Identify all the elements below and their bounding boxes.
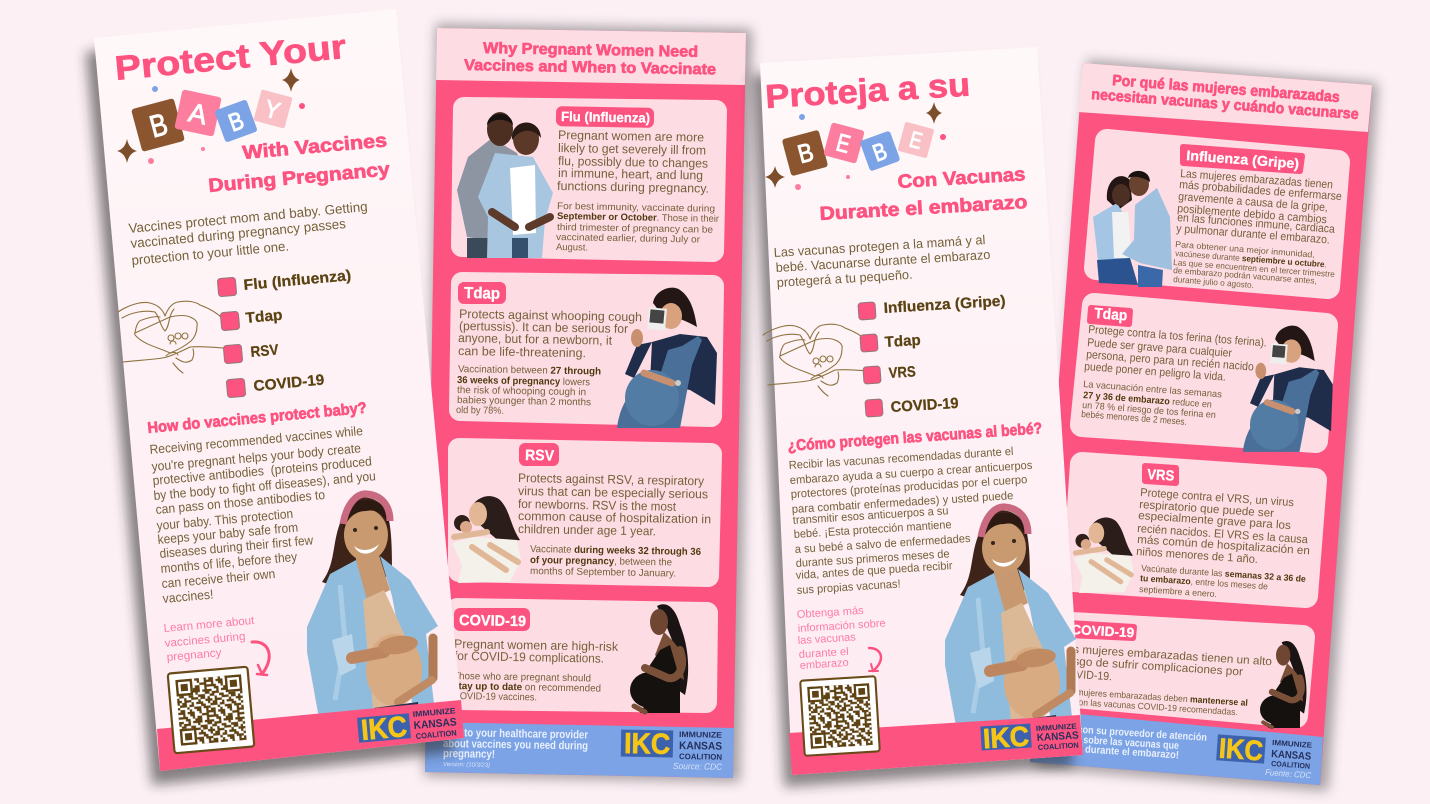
text: influenza timing: durante julio o agosto.: [1173, 274, 1254, 290]
QR code: [168, 667, 254, 753]
text: influenza timing: de embarazo podrán vacunarse antes,: [1173, 265, 1317, 286]
logo: IKC: [980, 721, 1079, 754]
heading: como protegen las vacunas al bebe: ¿Cómo protegen las vacunas al bebé?: [787, 420, 1043, 455]
text: learn more: [163, 615, 256, 664]
text: explanation: vida, antes de que pueda recibir: [795, 560, 953, 582]
text: intro: [773, 232, 991, 290]
text: RSV timing: months of September to January.: [530, 566, 676, 580]
vaccine checklist: [858, 293, 1006, 417]
logo: IKC: KANSAS: [413, 716, 457, 732]
card: Tdap: [1081, 305, 1333, 452]
text: flu timing: vaccinated earlier, during July or: [556, 232, 701, 246]
text: intro: vaccinated during pregnancy passes: [130, 216, 347, 251]
text: Tdap description: (pertussis). It can be serious for: [459, 319, 628, 336]
text: influenza timing: Las que se encuentren en el tercer trimestre: [1173, 257, 1335, 279]
text: explanation: transmitir esos anticuerpos a su: [792, 505, 949, 527]
text: RSV description: children under age 1 year.: [518, 522, 656, 538]
text: influenza description: [1176, 168, 1342, 247]
text: explanation: durante sus primeros meses de: [795, 548, 950, 570]
card: COVID-19: [453, 604, 707, 713]
text: intro: protegerá a tu pequeño.: [776, 267, 913, 290]
text: explanation: months of life, before they: [160, 549, 298, 576]
text: learn more: vaccines during: [164, 631, 246, 650]
footer band: Source: CDC: [673, 761, 723, 772]
text: explanation: can receive their own: [161, 566, 276, 591]
text: COVID-19 advice: Las mujeres embarazadas deben mantenerse al: [1060, 686, 1248, 708]
title blocks: BABY: B: [225, 106, 248, 137]
arrow: to QR code: [869, 648, 881, 671]
text: influenza timing: [1173, 239, 1335, 290]
photo: woman holding ultrasound: [1243, 326, 1333, 452]
footer band: Version: (10/3/23): [443, 762, 490, 769]
vaccine checklist: Tdap: [884, 332, 921, 351]
QR code: [800, 676, 880, 756]
text: COVID-19 description: COVID-19.: [1060, 668, 1112, 683]
text: Tdap description: Protects against whooping cough: [459, 307, 642, 324]
title blocks: BABY: Y: [261, 95, 283, 125]
text: VRS description: respiratorio que puede ser: [1139, 499, 1274, 520]
text: explanation: your baby. This protection: [156, 506, 294, 533]
vaccine checklist: [217, 267, 352, 398]
logo: IKC: KANSAS: [1036, 729, 1079, 744]
text: influenza description: Las mujeres embarazadas tienen: [1180, 168, 1333, 191]
logo: IKC: IMMUNIZE: [412, 706, 457, 719]
photo: smiling pregnant woman: [945, 507, 1076, 737]
logo: IKC: IKC: [624, 728, 670, 761]
photo: couple foreheads together: [1093, 171, 1172, 287]
photo: mother kissing newborn: [1074, 517, 1134, 593]
text: influenza timing: vacúnese durante septiembre u octubre.: [1175, 248, 1327, 269]
text: RSV timing: Vaccinate during weeks 32 through 36: [530, 544, 702, 558]
footer band: [425, 722, 734, 778]
logo: IKC: IMMUNIZE: [679, 730, 723, 740]
text: RSV description: [518, 471, 711, 538]
header band: Por qué las mujeres embarazadas: [1112, 72, 1340, 106]
label: Tdap: Tdap: [464, 285, 500, 303]
text: COVID-19 description: Las mujeres embarazadas tienen un alto: [1060, 643, 1272, 668]
text: learn more: embarazo: [799, 657, 849, 672]
title: Protect Your: Protect Your: [113, 28, 348, 88]
text: learn more: información sobre: [797, 617, 886, 635]
photo: expecting couple: [457, 112, 553, 258]
title: Proteja a su: Proteja a su: [764, 66, 971, 115]
photo: pregnant woman in profile: [1260, 641, 1307, 728]
vaccine checklist: COVID-19: [253, 371, 325, 395]
vaccine checklist: Influenza (Gripe): [883, 293, 1006, 317]
text: flu description: Pregnant women are more: [558, 128, 704, 145]
card: flu: [457, 106, 720, 258]
title blocks: BEBE: B: [869, 138, 891, 167]
label: Tdap: Tdap: [1094, 305, 1128, 324]
subtitle: [819, 164, 1028, 225]
text: explanation: Receiving recommended vaccines while: [149, 423, 363, 457]
text: flu description: [557, 128, 709, 196]
label: Tdap: [458, 282, 506, 304]
text: Tdap timing: 27 y 36 de embarazo reduce en: [1083, 390, 1212, 411]
vaccine checklist: Tdap: [245, 307, 283, 327]
subtitle: During Pregnancy: [208, 159, 391, 197]
text: influenza description: gravemente a causa de la gripe,: [1178, 191, 1328, 214]
text: Tdap timing: old by 78%.: [456, 405, 504, 417]
label: flu: Flu (Influenza): [561, 109, 650, 126]
text: COVID-19 advice: Those who are pregnant should: [453, 671, 591, 684]
title blocks: BABY: A: [186, 97, 210, 131]
vaccine checklist: COVID-19: [890, 395, 959, 416]
footer band: médica sobre las vacunas que: [1050, 732, 1179, 752]
logo: IKC: KANSAS: [679, 740, 722, 753]
text: influenza description: más probabilidades de enfermarse: [1179, 179, 1342, 203]
header band: Why Pregnant Women Need: [483, 40, 698, 61]
panel: Spanish back page, why and when to vaccinate: [1030, 63, 1372, 785]
panel: English back page, why and when to vaccinate: [425, 28, 746, 778]
label: RSV: [519, 443, 559, 466]
footer band: Talk to your healthcare provider: [443, 727, 589, 742]
text: Tdap timing: babies younger than 2 months: [457, 395, 591, 408]
text: Tdap description: anyone, but for a newborn, it: [458, 331, 613, 348]
text: Tdap timing: Vaccination between 27 through: [458, 364, 601, 377]
arrow: to QR code: [252, 642, 269, 675]
text: explanation: can pass on those antibodies to: [155, 487, 326, 517]
title blocks: BEBE: E: [833, 129, 853, 159]
subtitle: [208, 130, 391, 197]
subtitle: Durante el embarazo: [819, 192, 1028, 225]
photo: mother kissing newborn: [452, 496, 521, 583]
text: VRS description: recién nacidos. El VRS es la causa: [1137, 523, 1309, 546]
vaccine checklist: Flu (Influenza): [243, 267, 352, 294]
text: VRS timing: septiembre a enero.: [1139, 584, 1217, 599]
text: Tdap description: puede poner en peligro la vida.: [1084, 361, 1226, 384]
label: COVID-19: COVID-19: [459, 612, 526, 630]
text: Tdap timing: 36 weeks of pregnancy lowers: [457, 375, 590, 388]
text: RSV description: Protects against RSV, a respiratory: [518, 471, 705, 488]
footer band: [789, 715, 1083, 775]
text: Tdap timing: the risk of whooping cough in: [457, 385, 586, 398]
icon: hands forming heart: [763, 324, 868, 396]
logo: IKC: IMMUNIZE: [1272, 738, 1312, 750]
panel: English front page, protect your baby: [94, 9, 464, 771]
text: Tdap timing: bebés menores de 2 meses.: [1081, 409, 1187, 428]
text: flu timing: September or October. Those in their: [557, 211, 720, 225]
text: learn more: Obtenga más: [796, 605, 865, 621]
header band: [1078, 63, 1372, 132]
text: VRS description: niños menores de 1 año.: [1136, 546, 1258, 566]
logo: IKC: COALITION: [415, 728, 457, 741]
subtitle: With Vaccines: [242, 130, 388, 164]
card: RSV: [452, 443, 711, 583]
text: flu description: flu, possibly due to changes: [558, 154, 708, 171]
text: Tdap timing: [456, 364, 601, 417]
text: learn more: [796, 605, 886, 672]
text: RSV timing: of your pregnancy, between the: [530, 555, 673, 568]
title blocks: BEBE: B: [794, 136, 817, 169]
icon: hands forming heart: [118, 301, 223, 373]
text: influenza description: en las funciones inmune, cardiaca: [1177, 212, 1336, 236]
text: RSV description: virus that can be especially serious: [518, 484, 708, 501]
text: VRS description: Protege contra el VRS, un virus: [1140, 487, 1294, 509]
logo: IKC: COALITION: [679, 752, 722, 762]
text: flu timing: August.: [556, 242, 588, 254]
header band: necesitan vacunas y cuándo vacunarse: [1091, 86, 1359, 123]
text: VRS description: más común de hospitalización en: [1137, 534, 1310, 557]
text: flu description: functions during pregnancy.: [557, 179, 709, 196]
label: RSV: RSV: [525, 447, 554, 465]
text: explanation: bebé. ¡Esta protección mantiene: [793, 519, 952, 541]
label: COVID-19: COVID-19: [1071, 622, 1135, 640]
text: explanation: sus propias vacunas!: [796, 578, 901, 597]
footer band: [157, 700, 464, 771]
text: flu description: in immune, heart, and lung: [558, 166, 703, 183]
logo: IKC: [621, 728, 723, 762]
text: Tdap description: Protege contra la tos ferina (tos ferina).: [1088, 324, 1267, 349]
text: explanation: embarazo ayuda a su cuerpo a crear anticuerpos: [789, 460, 1033, 487]
vaccine checklist: RSV: [250, 341, 279, 361]
footer band: [1030, 710, 1323, 785]
text: intro: Vaccines protect mom and baby. Getting: [128, 199, 368, 236]
title blocks: BABY: [117, 68, 305, 164]
text: learn more: las vacunas: [797, 631, 857, 647]
text: flu timing: third trimester of pregnancy can be: [557, 222, 713, 236]
card: influenza: [1093, 141, 1342, 290]
subtitle: Con Vacunas: [897, 164, 1026, 193]
logo: IKC: COALITION: [1271, 759, 1310, 771]
text: learn more: durante el: [798, 646, 849, 661]
text: COVID-19 description: Pregnant women are high-risk: [454, 637, 619, 654]
text: COVID-19 description: [454, 637, 619, 666]
text: COVID-19 description: for COVID-19 complications.: [454, 649, 604, 666]
logo: IKC: [1216, 732, 1312, 771]
panel: Spanish front page, proteja a su bebe: [760, 47, 1083, 775]
text: Tdap description: [458, 307, 642, 360]
text: explanation: protective antibodies (proteins produced: [152, 453, 372, 488]
footer band: pregnancy!: [443, 748, 495, 761]
footer band: about vaccines you need during: [443, 738, 588, 753]
text: Tdap timing: un 78 % el riesgo de tos ferina en: [1082, 400, 1216, 421]
text: learn more: pregnancy: [166, 647, 222, 664]
title blocks: BEBE: E: [907, 126, 925, 154]
text: explanation: [149, 423, 376, 606]
text: RSV description: for newborns. RSV is the most: [518, 497, 677, 514]
text: influenza timing: Para obtener una mejor inmunidad,: [1175, 239, 1315, 259]
logo: IKC: KANSAS: [1271, 748, 1312, 763]
text: RSV description: common cause of hospitalization in: [518, 509, 711, 526]
logo: IKC: IKC: [982, 721, 1030, 754]
card: VRS: [1074, 464, 1315, 599]
text: explanation: protectores (proteínas producidas por el cuerpo: [790, 474, 1028, 501]
text: explanation: diseases during their first few: [159, 532, 314, 561]
logo: IKC: IMMUNIZE: [1036, 722, 1077, 733]
text: Tdap description: persona, pero para un recién nacido: [1086, 349, 1254, 374]
logo: IKC: IKC: [360, 711, 408, 747]
text: Tdap timing: [1081, 379, 1222, 428]
photo: woman holding ultrasound: [617, 288, 717, 428]
text: COVID-19 advice: stay up to date on recommended: [453, 681, 601, 695]
text: explanation: by the body to fight off diseases), and you: [153, 468, 376, 503]
footer band: Fuente: CDC: [1265, 767, 1312, 780]
label: VRS: VRS: [1147, 467, 1175, 485]
text: COVID-19 advice: día con las vacunas COVID-19 recomendadas.: [1060, 696, 1238, 717]
logo: IKC: COALITION: [1038, 741, 1079, 752]
text: VRS description: especialmente grave para los: [1138, 510, 1292, 532]
text: explanation: Recibir las vacunas recomendadas durante el: [788, 446, 1014, 472]
text: VRS timing: tu embarazo, entre los meses de: [1140, 573, 1268, 591]
text: COVID-19 advice: [453, 671, 601, 703]
logo: IKC: [357, 706, 457, 747]
vaccine checklist: VRS: [888, 363, 916, 382]
text: COVID-19 advice: COVID-19 vaccines.: [453, 691, 537, 703]
text: VRS timing: Vacúnate durante las semanas 32 a 36 de: [1141, 563, 1306, 584]
text: influenza description: posiblemente debido a cambios: [1177, 203, 1327, 226]
footer band: necesita durante el embarazo!: [1045, 741, 1179, 761]
text: explanation: you're pregnant helps your body create: [151, 440, 361, 474]
text: COVID-19 description: riesgo de sufrir complicaciones por: [1060, 655, 1243, 678]
text: influenza description: y pulmonar durante el embarazo.: [1176, 223, 1330, 247]
text: Tdap description: [1084, 324, 1267, 384]
text: learn more: Learn more about: [163, 615, 256, 635]
text: Tdap description: Puede ser grave para cualquier: [1087, 337, 1232, 360]
label: influenza: Influenza (Gripe): [1186, 147, 1300, 171]
text: flu description: likely to get severely ill from: [558, 141, 706, 158]
photo: pregnant woman in profile: [630, 604, 688, 713]
photo: smiling pregnant woman: [307, 494, 438, 724]
text: intro: [128, 199, 368, 268]
text: explanation: para combatir enfermedades) y usted puede: [791, 490, 1014, 516]
title blocks: BABY: B: [146, 106, 171, 144]
text: intro: bebé. Vacunarse durante el embarazo: [775, 247, 991, 275]
text: flu timing: For best immunity, vaccinate during: [557, 201, 715, 215]
text: COVID-19 description: [1060, 643, 1272, 683]
text: explanation: vaccines!: [162, 587, 214, 606]
text: intro: Las vacunas protegen a la mamá y al: [773, 232, 986, 260]
text: Tdap description: can be life-threatening.: [458, 344, 586, 360]
header band: Vaccines and When to Vaccinate: [464, 57, 717, 78]
logo: IKC: IKC: [1218, 733, 1264, 766]
footer band: Hable con su proveedor de atención: [1050, 722, 1207, 744]
text: VRS timing: [1139, 563, 1306, 599]
text: VRS description: [1136, 487, 1310, 566]
card: COVID-19: [1060, 622, 1307, 728]
title blocks: BEBE: [765, 102, 946, 190]
text: COVID-19 advice: [1060, 686, 1248, 717]
text: intro: protection to your little one.: [131, 238, 290, 268]
heading: how do vaccines protect baby: How do vaccines protect baby?: [147, 400, 367, 437]
card: Tdap: [456, 282, 717, 428]
text: explanation: a su bebé a salvo de enfermedades: [794, 533, 971, 556]
text: explanation: keeps your baby safe from: [157, 520, 299, 547]
text: flu timing: [556, 201, 720, 254]
header band: [436, 28, 746, 85]
text: RSV timing: [530, 544, 702, 580]
text: Tdap timing: La vacunación entre las semanas: [1083, 379, 1222, 400]
text: explanation: [788, 446, 1033, 597]
